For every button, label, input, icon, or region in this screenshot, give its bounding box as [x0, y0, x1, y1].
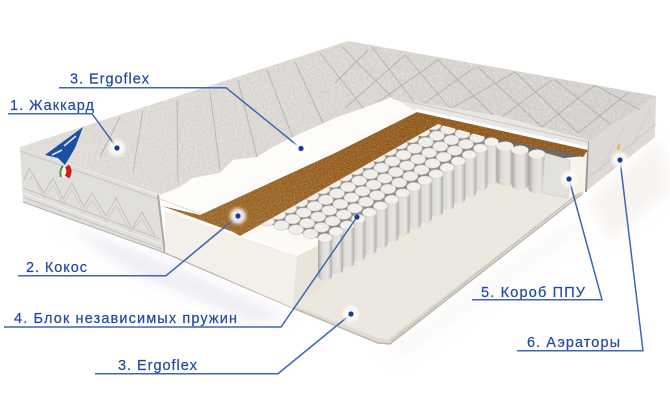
aerator mark [618, 144, 619, 150]
spring tops [259, 120, 485, 239]
foam end block [542, 153, 570, 198]
marker dot [343, 306, 359, 322]
foam far wall [568, 152, 587, 198]
leader line [18, 216, 238, 276]
back spring row [496, 142, 546, 194]
marker dot [109, 140, 125, 156]
foam front face [165, 211, 297, 308]
leader line [517, 160, 643, 351]
label: 3. Ergoflex bottom: 3. Ergoflex [118, 358, 198, 374]
label: 1. Жаккард: 1. Жаккард [10, 98, 95, 114]
polyurethane foam box [160, 152, 587, 308]
top quilted surface [20, 41, 656, 195]
marker dot [561, 171, 577, 187]
spring field base [262, 128, 500, 242]
foam inner wall [293, 240, 330, 308]
leader: upper Ergoflex [59, 72, 309, 156]
marker dot [612, 152, 628, 168]
front spring row [318, 138, 498, 280]
brand label [45, 127, 83, 165]
leader line [95, 314, 351, 374]
leader line [472, 179, 602, 300]
label: 4. Блок независимых пружин: 4. Блок независимых пружин [14, 311, 238, 327]
leader line [4, 217, 357, 327]
leader: aerators [517, 152, 643, 351]
marker dot [354, 214, 360, 220]
tricolor tag [59, 166, 71, 178]
leader: coconut [18, 208, 246, 276]
label: 2. Кокос: 2. Кокос [26, 260, 88, 276]
mattress outer cover [20, 41, 656, 253]
label: 3. Ergoflex: 3. Ergoflex [70, 72, 150, 88]
leader: lower Ergoflex [95, 306, 359, 374]
foam top end [160, 199, 325, 256]
right side panel [585, 96, 656, 192]
leader: spring block [4, 214, 360, 327]
bottom Ergoflex sheet [165, 182, 584, 344]
label: 5. Короб ППУ: 5. Короб ППУ [481, 285, 586, 301]
leader line [8, 114, 117, 148]
floor shadow [60, 140, 668, 360]
leader: foam box [472, 171, 602, 301]
upper Ergoflex sheet [160, 97, 588, 214]
label: 6. Аэраторы: 6. Аэраторы [527, 335, 621, 351]
marker dot [293, 140, 309, 156]
left side panel [20, 147, 165, 253]
pocket spring block [259, 120, 585, 280]
back gap shadow [440, 127, 585, 160]
leader: Jacquard [8, 98, 125, 156]
marker dot [230, 208, 246, 224]
coconut coir layer [162, 112, 588, 236]
leader line [59, 88, 301, 148]
